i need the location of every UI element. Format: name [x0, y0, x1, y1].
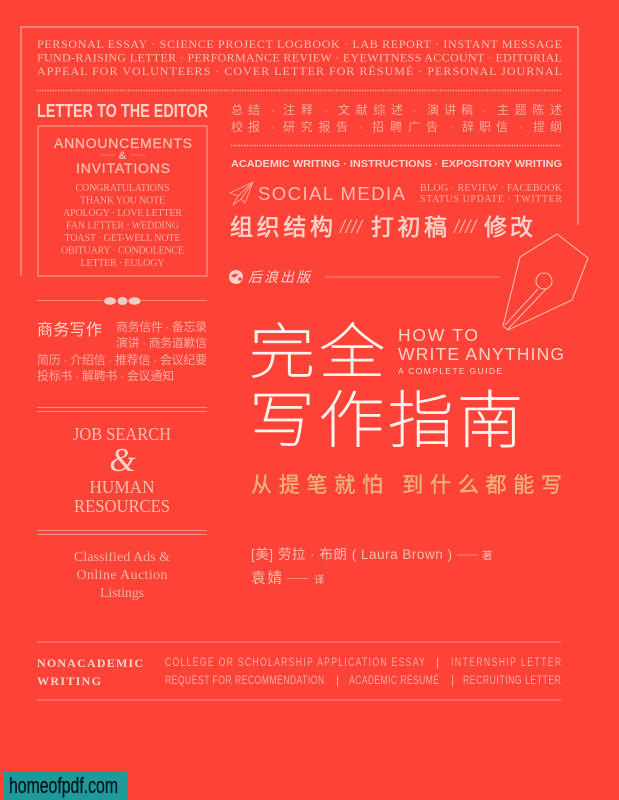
heading: letter to the editor: LETTER TO THE EDITOR: [37, 101, 208, 121]
list: occasions: LETTER · EULOGY: [80, 258, 164, 269]
heading: job search and human resources: [73, 424, 171, 516]
text block: business writing list: 商务信件 · 备忘录: [116, 319, 207, 334]
list: occasions: TOAST · GET-WELL NOTE: [64, 233, 180, 244]
writing steps: ////: [338, 217, 364, 237]
text block: classified ads: Classified Ads &: [74, 550, 170, 565]
text block: chinese genres: ·: [324, 103, 328, 117]
heading: nonacademic writing: WRITING: [37, 674, 101, 688]
list: occasions: FAN LETTER · WEDDING: [66, 220, 179, 232]
text block: chinese genres: 辞职信: [462, 119, 508, 134]
watermark: [3, 771, 127, 800]
text block: nonacademic list: REQUEST FOR RECOMMENDATION: [165, 675, 324, 687]
text block: chinese genres: 注释: [283, 102, 313, 117]
text block: chinese genres: 主题陈述: [497, 102, 562, 117]
writing steps: [230, 214, 533, 240]
heading: job search and human resources: JOB SEARCH: [73, 424, 171, 444]
translator credit: 袁婧: [251, 570, 282, 587]
list: occasions: OBITUARY · CONDOLENCE: [61, 246, 184, 256]
text block: social media list: BLOG · REVIEW · FACEBOOK: [420, 183, 563, 194]
text block: chinese genres: ·: [519, 120, 523, 134]
text block: nonacademic list: ACADEMIC RÉSUMÉ: [349, 673, 439, 687]
text block: nonacademic list: INTERNSHIP LETTER: [451, 657, 562, 669]
translator credit: [251, 570, 325, 587]
text block: chinese genres: ·: [271, 120, 275, 134]
text block: business writing list: 演讲 · 商务道歉信: [116, 335, 207, 350]
heading: social media: SOCIAL MEDIA: [258, 183, 406, 204]
text block: nonacademic list: RECRUITING LETTER: [463, 675, 561, 687]
heading: business writing: 商务写作: [37, 321, 102, 339]
publisher logo: 后浪出版: [248, 269, 312, 285]
list: occasions: THANK YOU NOTE: [80, 196, 165, 206]
text block: chinese genres: 校报: [231, 119, 260, 134]
text block: chinese genres: ·: [482, 103, 486, 117]
list: occasions: [61, 183, 184, 269]
ampersand with side rules: &: [119, 150, 127, 162]
text block: chinese genres: 研究报告: [283, 119, 348, 134]
writing steps: ////: [452, 217, 478, 237]
text block: business writing list: 投标书 · 解聘书 · 会议通知: [37, 368, 174, 383]
divider with three dots: [37, 297, 207, 305]
heading: announcements: ANNOUNCEMENTS: [54, 135, 192, 151]
text block: chinese genres: [231, 102, 562, 134]
title: english: WRITE ANYTHING: [398, 344, 564, 364]
title: chinese: 完全: [249, 320, 385, 386]
text block: business writing list: 简历 · 介绍信 · 推荐信 · 会议纪要: [37, 353, 207, 367]
watermark: homeofpdf.com: [9, 773, 118, 798]
text block: chinese genres: ·: [271, 103, 275, 117]
heading: job search and human resources: &: [109, 442, 136, 479]
text block: chinese genres: ·: [359, 120, 363, 134]
title: english: [398, 325, 564, 376]
text block: nonacademic list: |: [451, 673, 454, 687]
text block: genre list: APPEAL FOR VOLUNTEERS · COVER LETTER FOR RÉSUMÉ · PERSONAL JOURNAL: [37, 64, 562, 78]
text block: classified ads: Online Auction: [76, 568, 168, 583]
heading: nonacademic writing: NONACADEMIC: [37, 656, 143, 670]
title: english: A COMPLETE GUIDE: [398, 366, 502, 376]
text block: business writing list: [37, 319, 207, 383]
text block: social media list: STATUS UPDATE · TWITTER: [420, 194, 562, 205]
title: chinese: 写作指南: [249, 386, 523, 456]
translator credit: 译: [314, 574, 325, 586]
writing steps: 打初稿: [371, 214, 447, 240]
frame lines: [21, 27, 578, 276]
text block: academic writing: ACADEMIC WRITING · INSTRUCTIONS · EXPOSITORY WRITING: [231, 158, 562, 170]
text block: genre list: FUND-RAISING LETTER · PERFORMANCE REVIEW · EYEWITNESS ACCOUNT · EDITORIAL: [37, 50, 562, 64]
title: english: HOW TO: [398, 325, 478, 345]
icon: fountain pen nib: [503, 234, 588, 330]
ampersand with side rules: [100, 150, 146, 162]
text block: nonacademic list: [165, 655, 562, 687]
icon: paper plane: [230, 182, 253, 205]
writing steps: 组织结构: [230, 214, 333, 240]
writing steps: 修改: [484, 214, 533, 240]
text block: genre list: [37, 37, 562, 78]
text block: nonacademic list: COLLEGE OR SCHOLARSHIP APPLICATION ESSAY: [165, 657, 425, 669]
text block: chinese genres: ·: [449, 120, 453, 134]
text block: chinese genres: 演讲稿: [427, 102, 473, 117]
text block: nonacademic list: |: [436, 655, 439, 669]
text block: nonacademic list: |: [336, 673, 339, 687]
heading: nonacademic writing: [37, 656, 143, 688]
author credit: [美] 劳拉 · 布朗 ( Laura Brown ): [251, 547, 452, 562]
list: occasions: CONGRATULATIONS: [76, 183, 170, 194]
author credit: 著: [482, 549, 492, 562]
panel: announcements and invitations: [38, 126, 207, 276]
text block: genre list: PERSONAL ESSAY · SCIENCE PROJECT LOGBOOK · LAB REPORT · INSTANT MESSAGE: [37, 37, 562, 51]
heading: job search and human resources: RESOURCES: [74, 496, 170, 516]
text block: chinese genres: ·: [412, 103, 416, 117]
text block: classified ads: [74, 550, 170, 601]
text block: chinese genres: 提纲: [533, 119, 562, 134]
heading: job search and human resources: HUMAN: [90, 477, 154, 497]
text block: classified ads: Listings: [100, 586, 144, 601]
subtitle: 从提笔就怕 到什么都能写: [251, 474, 562, 497]
text block: chinese genres: 文献综述: [338, 102, 403, 117]
title: chinese: [249, 320, 523, 456]
text block: chinese genres: 招聘广告: [372, 120, 438, 134]
text block: chinese genres: 总结: [231, 103, 260, 117]
list: occasions: APOLOGY · LOVE LETTER: [63, 208, 182, 219]
heading: invitations: INVITATIONS: [76, 160, 170, 176]
text block: social media list: [420, 183, 563, 205]
